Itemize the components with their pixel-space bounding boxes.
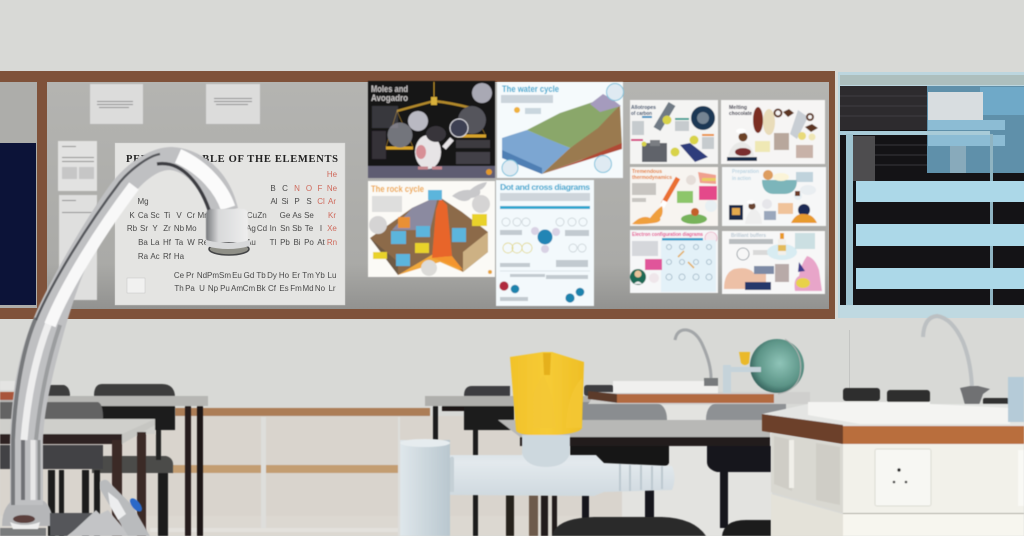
- back chair: [464, 386, 510, 396]
- element symbols: Ag: [246, 224, 256, 233]
- Allotropes heading: Allotropes: [631, 105, 656, 111]
- element symbols: Kr: [328, 211, 336, 220]
- element symbols: Te: [305, 224, 314, 233]
- element symbols: Th: [174, 284, 184, 293]
- element symbols: Am: [231, 284, 243, 293]
- element symbols: Y: [152, 224, 158, 233]
- element symbols: Lu: [328, 271, 336, 280]
- element symbols: Hf: [163, 238, 172, 247]
- faucet aerator: [209, 243, 249, 255]
- element symbols: Ge: [280, 211, 291, 220]
- side sockets: [774, 436, 840, 505]
- element symbols: Rb: [127, 224, 138, 233]
- brick wall reflection: [840, 86, 927, 130]
- poster: Tremendous thermodynamics: [630, 167, 718, 226]
- element symbols: Md: [302, 284, 314, 293]
- large chrome faucet: [0, 147, 250, 536]
- element symbols: Au: [246, 238, 256, 247]
- element symbols: Ha: [174, 252, 185, 261]
- legend key: [127, 278, 145, 293]
- element symbols: Ra: [138, 252, 149, 261]
- louvre bars: [856, 181, 1024, 202]
- element symbols: I: [320, 224, 322, 233]
- cabinet: [771, 433, 843, 513]
- poster: Melting chocolate: [721, 100, 825, 164]
- gas tap foreground: [400, 352, 674, 536]
- element symbols: Dy: [267, 271, 277, 280]
- element symbols: Se: [304, 211, 314, 220]
- element symbols: Ar: [328, 197, 336, 206]
- element symbols: Es: [279, 284, 289, 293]
- small gas tap: [723, 365, 731, 393]
- element symbols: Er: [292, 271, 300, 280]
- blue reflection: [927, 86, 1024, 173]
- element symbols: Tl: [270, 238, 277, 247]
- element symbols: Fm: [290, 284, 302, 293]
- element symbols: Cm: [243, 284, 256, 293]
- element symbols: Bi: [293, 238, 301, 247]
- element symbols: Si: [281, 197, 289, 206]
- element symbols: Cu: [247, 211, 257, 220]
- right counter: [762, 316, 1024, 536]
- globe: [750, 339, 804, 393]
- faucet tube: [10, 147, 238, 505]
- element symbols: V: [176, 211, 182, 220]
- element symbols: U: [199, 284, 205, 293]
- brick lines: [840, 96, 927, 165]
- periodic table poster: [115, 143, 345, 305]
- navy panel: [0, 143, 36, 305]
- element symbols: Tm: [302, 271, 314, 280]
- front mid table: [498, 420, 770, 437]
- large sink: [808, 402, 1010, 424]
- element symbols: Pb: [280, 238, 290, 247]
- element symbols: Ba: [138, 238, 148, 247]
- back left table: [0, 396, 208, 406]
- poster: Moles and Avogadro: [368, 81, 495, 178]
- Allotropes heading: of carbon: [631, 111, 652, 117]
- Tremendous heading: thermodynamics: [632, 175, 672, 181]
- mole scientist: [415, 126, 452, 169]
- counter top: [762, 404, 1024, 426]
- Preparation heading: in action: [732, 176, 751, 182]
- element symbols: [127, 170, 338, 293]
- element symbols: Sb: [292, 224, 302, 233]
- bulletin board: [0, 71, 835, 319]
- poster: The rock cycle: [368, 181, 495, 277]
- element symbols: Cf: [268, 284, 277, 293]
- main cork panel: [47, 82, 829, 309]
- front chairs: [570, 402, 667, 420]
- wood front: [762, 414, 843, 444]
- element symbols: S: [306, 197, 312, 206]
- periodic table heading: PERIODIC TABLE OF THE ELEMENTS: [126, 154, 338, 165]
- wood edge far left: [0, 381, 15, 390]
- black seats: [552, 517, 706, 536]
- poster: Electron configuration diagrams: [630, 230, 718, 293]
- element symbols: Gd: [244, 271, 254, 280]
- chairs behind counter: [843, 388, 880, 401]
- element symbols: Pm: [207, 271, 219, 280]
- poster: Dot and cross diagrams: [496, 180, 594, 306]
- element symbols: O: [306, 184, 312, 193]
- element symbols: Ca: [138, 211, 149, 220]
- chair seat: [92, 456, 173, 473]
- rock cycle label boxes: [373, 190, 487, 266]
- element symbols: Re: [198, 238, 209, 247]
- element symbols: Rn: [327, 238, 337, 247]
- Preparation heading: Preparation: [732, 169, 759, 175]
- water cycle heading: The water cycle: [502, 84, 559, 94]
- Electron heading: Electron configuration diagrams: [632, 232, 703, 238]
- element symbols: K: [129, 211, 135, 220]
- element symbols: Tb: [256, 271, 266, 280]
- element symbols: Cr: [187, 211, 196, 220]
- wall socket: [875, 449, 931, 506]
- middle tables and chairs: [425, 385, 786, 536]
- element symbols: At: [317, 238, 326, 247]
- faucet handle: [50, 480, 150, 536]
- element symbols: Sm: [219, 271, 231, 280]
- poster: Allotropes of carbon: [630, 100, 718, 164]
- faucet base: [0, 501, 53, 536]
- element symbols: Sc: [150, 211, 160, 220]
- element symbols: La: [151, 238, 160, 247]
- faucet column reflections: [13, 318, 36, 505]
- faucet head: [206, 209, 248, 243]
- window: [838, 72, 1024, 318]
- Brilliant heading: Brilliant buffers: [731, 233, 766, 239]
- element symbols: Cl: [317, 197, 325, 206]
- poster: Brilliant buffers: [722, 231, 825, 294]
- element symbols: F: [318, 184, 323, 193]
- pale cylinder: [1008, 377, 1024, 422]
- back wood bench with sink: [588, 330, 810, 404]
- board frame: [0, 71, 835, 319]
- element symbols: Zn: [257, 211, 267, 220]
- tap body: [450, 435, 674, 496]
- dot and cross heading: Dot and cross diagrams: [500, 182, 590, 192]
- element symbols: Mo: [185, 224, 197, 233]
- element symbols: As: [292, 211, 302, 220]
- element symbols: Bk: [256, 284, 267, 293]
- small faucet: [675, 330, 711, 378]
- wall panel seam: [849, 330, 850, 390]
- balance scale: [386, 82, 486, 148]
- element symbols: Ne: [327, 184, 338, 193]
- right faucet: [923, 316, 972, 388]
- element symbols: Pr: [186, 271, 194, 280]
- element symbols: Po: [304, 238, 314, 247]
- back chairs: [46, 384, 175, 396]
- left reflection: [853, 136, 875, 181]
- element symbols: Lr: [328, 284, 336, 293]
- element symbols: Ti: [164, 211, 170, 220]
- Melting heading: chocolate: [729, 111, 752, 117]
- element symbols: Yb: [315, 271, 325, 280]
- Tremendous heading: Tremendous: [632, 169, 662, 175]
- element symbols: Sr: [140, 224, 148, 233]
- element symbols: B: [270, 184, 276, 193]
- element symbols: Sn: [280, 224, 290, 233]
- element symbols: W: [187, 238, 195, 247]
- frame rails: [840, 131, 990, 135]
- yellow valve handle: [510, 352, 584, 435]
- element symbols: Al: [270, 197, 278, 206]
- element symbols: Ce: [174, 271, 185, 280]
- element symbols: No: [315, 284, 326, 293]
- element symbols: Ho: [279, 271, 290, 280]
- element symbols: He: [327, 170, 338, 179]
- back table: [425, 396, 595, 406]
- element symbols: Rf: [163, 252, 172, 261]
- ball and stick molecules: [499, 281, 584, 303]
- element symbols: Mg: [137, 197, 149, 206]
- element symbols: Nb: [174, 224, 185, 233]
- element symbols: Nd: [197, 271, 207, 280]
- molecule: [531, 227, 560, 253]
- rock cycle heading: The rock cycle: [371, 184, 424, 194]
- element symbols: Pu: [220, 284, 230, 293]
- element symbols: C: [282, 184, 288, 193]
- element symbols: Eu: [232, 271, 242, 280]
- element symbols: Cd: [257, 224, 267, 233]
- element symbols: P: [294, 197, 300, 206]
- poster: The water cycle: [497, 82, 624, 178]
- element symbols: In: [270, 224, 276, 233]
- pinned notices: [58, 84, 260, 300]
- element symbols: N: [294, 184, 300, 193]
- element symbols: Mn: [197, 211, 209, 220]
- back left furniture: [0, 381, 208, 536]
- lower shelving unit: [0, 405, 772, 536]
- element symbols: Xe: [327, 224, 337, 233]
- element symbols: Ac: [150, 252, 160, 261]
- small sink: [613, 381, 718, 393]
- poster: Preparation in action: [722, 167, 826, 226]
- Moles heading: Moles and: [371, 84, 408, 95]
- element symbols: Ta: [175, 238, 184, 247]
- front left table: [0, 419, 155, 434]
- element symbols: Np: [208, 284, 219, 293]
- Melting heading: Melting: [729, 105, 748, 111]
- element symbols: Pa: [185, 284, 195, 293]
- element symbols: Zr: [163, 224, 171, 233]
- left cork panel: [0, 82, 37, 308]
- Moles heading: Avogadro: [371, 93, 408, 104]
